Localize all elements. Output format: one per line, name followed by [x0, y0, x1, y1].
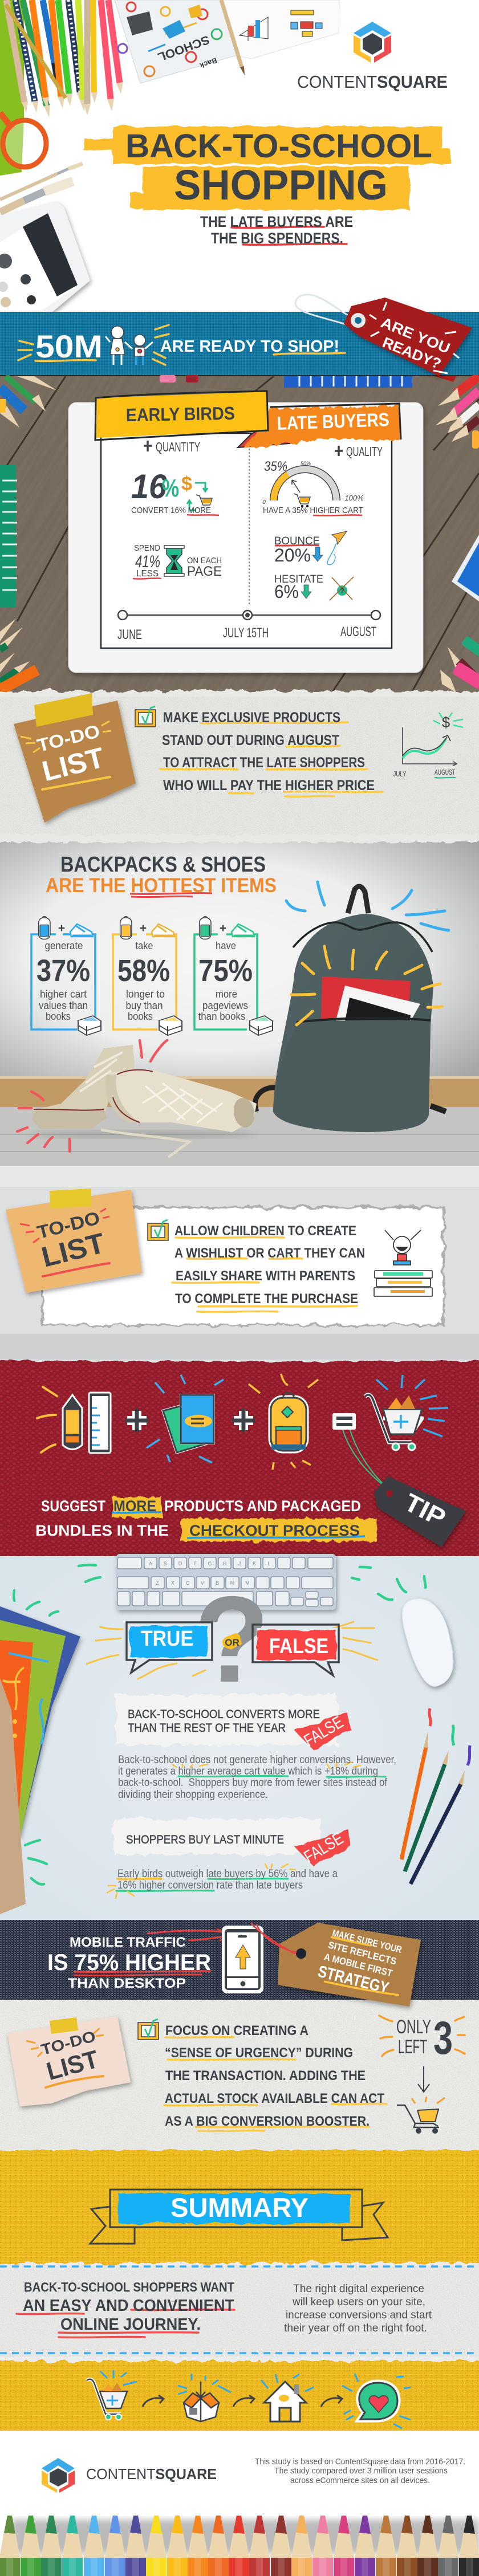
question mark: ? — [194, 1570, 270, 1708]
icon: backpack — [269, 1393, 308, 1452]
myth one title: BACK-TO-SCHOOL CONVERTS MORE — [128, 1708, 320, 1721]
myth two torn paper — [113, 1818, 321, 1854]
plus quality — [335, 444, 383, 459]
skirting board — [0, 1077, 479, 1109]
yellow fabric background — [0, 2150, 479, 2431]
tag: tip: TIP — [400, 1488, 450, 1532]
coloured pencil row — [0, 2516, 479, 2576]
floor — [0, 1107, 479, 1170]
early birds banner: EARLY BIRDS — [125, 403, 235, 425]
icon: checkbox — [148, 1220, 168, 1240]
yellow brush highlights — [112, 1497, 377, 1541]
sneaker shadow — [29, 1130, 257, 1138]
tip text: SUGGEST — [41, 1497, 105, 1515]
to-do one text: TO ATTRACT THE LATE SHOPPERS — [163, 755, 365, 771]
section: mobile traffic — [0, 1920, 479, 2007]
icon: checkbox — [135, 706, 156, 727]
header photo: pencils and school supplies — [0, 0, 339, 312]
tip text: PRODUCTS AND PACKAGED — [164, 1497, 361, 1515]
note: TO-DO — [39, 2028, 98, 2058]
tag: tip — [374, 1476, 466, 1547]
convert caption: CONVERT 16% MORE — [131, 506, 211, 515]
summary band texture — [0, 2266, 479, 2357]
top right pencils — [436, 376, 479, 449]
chart: price rising from July to August: $ — [442, 714, 450, 731]
mouse — [402, 1599, 453, 1686]
hesitate stat — [274, 573, 354, 602]
logo: ContentSquare — [297, 22, 448, 92]
true bubble: TRUE — [141, 1627, 193, 1651]
to-do three text: THE TRANSACTION. ADDING THE — [165, 2068, 366, 2083]
right paint palette — [452, 535, 479, 601]
myth one — [116, 1695, 396, 1801]
summary main statement: AN EASY AND CONVENIENT — [23, 2297, 234, 2315]
timeline: AUGUST — [340, 624, 376, 640]
icon: cart — [397, 2097, 445, 2134]
wall background — [0, 841, 479, 1081]
card: 75 percent: 75% — [198, 954, 253, 988]
icon: child on books — [374, 1230, 432, 1296]
card: 37 percent: higher cart — [40, 988, 87, 1000]
summary torn band — [0, 2263, 479, 2361]
chart: price rising from July to August — [393, 713, 463, 778]
keyboard: K — [253, 1561, 256, 1566]
to-do one underlines — [160, 722, 383, 797]
keyboard: M — [245, 1580, 250, 1586]
myth two highlights — [107, 1864, 295, 1898]
gauge: 35% — [264, 459, 287, 474]
or badge — [222, 1633, 243, 1650]
bottom right pencils — [440, 636, 479, 693]
title — [84, 127, 450, 210]
front sneaker — [101, 1069, 257, 1157]
chart: price rising from July to August: JULY — [393, 770, 407, 778]
kraft tag: STRATEGY — [316, 1963, 391, 1997]
desk background — [0, 1556, 479, 1921]
banner text: ARE READY TO SHOP! — [160, 337, 339, 356]
card: 58 percent: take — [136, 940, 153, 951]
to-do three text: AS A BIG CONVERSION BOOSTER. — [165, 2114, 370, 2129]
card: 75 percent: + — [220, 922, 226, 935]
section: backpacks and shoes — [0, 835, 479, 1189]
icon: box — [184, 2382, 219, 2422]
spend 41 percent — [133, 543, 161, 579]
subtitle line 1: THE LATE BUYERS ARE — [200, 213, 353, 230]
paper background of to-do list three — [0, 2000, 479, 2151]
tag: are you ready: ARE YOU — [379, 314, 453, 357]
tablet photo — [0, 201, 90, 312]
gauge: 0 — [262, 499, 266, 506]
cart caption: HAVE A 35% HIGHER CART — [263, 506, 363, 515]
section: true or false — [0, 1554, 479, 1921]
myth one title second line: THAN THE REST OF THE YEAR — [128, 1722, 286, 1735]
summary ribbon — [90, 2190, 388, 2244]
icon: checkbox — [138, 2019, 159, 2040]
16 percent stat — [131, 467, 212, 510]
arrow down — [418, 2066, 429, 2092]
timeline: JUNE — [117, 627, 142, 642]
kraft tag: MAKE SURE YOUR — [331, 1927, 403, 1955]
hesitate stat: ? — [340, 587, 344, 595]
card: 58 percent: + — [140, 922, 147, 935]
note: LIST — [43, 2045, 102, 2086]
keyboard: X — [171, 1580, 174, 1586]
to-do two text: A WISHLIST OR CART THEY CAN — [174, 1246, 365, 1261]
chart: price rising from July to August: AUGUST — [435, 768, 455, 776]
yellow rays — [87, 1622, 377, 1679]
card: 58 percent — [113, 917, 182, 1035]
desk supplies around tablet — [0, 375, 479, 693]
title line 1: BACK-TO-SCHOOL — [125, 128, 432, 165]
spend 41 percent: LESS — [136, 569, 159, 579]
on each page: ON EACH — [187, 556, 222, 565]
arrow — [321, 2395, 342, 2407]
paint brushes — [0, 164, 83, 212]
timeline: JULY 15TH — [223, 625, 269, 641]
summary brush — [119, 2194, 350, 2223]
myth one torn paper — [116, 1695, 338, 1745]
myth one explanation — [118, 1754, 396, 1801]
keyboard: B — [216, 1580, 219, 1586]
wooden pencil on paper — [221, 0, 245, 75]
kraft tag — [251, 1923, 421, 2007]
sparks around pencil — [37, 1387, 57, 1452]
only 3 left: LEFT — [398, 2036, 427, 2058]
keyboard: S — [164, 1561, 167, 1566]
mobile traffic text: MOBILE TRAFFIC — [70, 1935, 186, 1950]
to-do one text — [162, 710, 375, 793]
myth two — [107, 1818, 351, 1898]
sparks around cart — [376, 1375, 448, 1436]
keyboard: H — [223, 1561, 226, 1566]
plus quantity: QUANTITY — [156, 439, 200, 454]
summary side text — [284, 2283, 432, 2334]
16 percent stat: % — [162, 474, 179, 502]
timeline — [117, 611, 380, 642]
to-do two text: TO COMPLETE THE PURCHASE — [175, 1291, 358, 1307]
late buyers column — [262, 444, 383, 602]
section: tip, bundles — [0, 1361, 479, 1561]
red underlines and arrows — [74, 1929, 229, 1976]
keyboard: J — [238, 1561, 241, 1566]
manila note: TO-DO — [35, 1207, 102, 1243]
plus sign — [127, 1411, 147, 1430]
keyboard: N — [230, 1580, 234, 1586]
title brush background — [84, 127, 450, 210]
to-do one text: MAKE EXCLUSIVE PRODUCTS — [163, 710, 340, 726]
false bubble: FALSE — [269, 1634, 328, 1658]
myth two explanation: Early birds outweigh late buyers by 56% and have a — [117, 1868, 338, 1880]
magnifier — [0, 113, 46, 167]
footer background — [0, 2431, 479, 2576]
bottom left pencils — [0, 618, 37, 690]
card: 75 percent — [194, 917, 273, 1035]
torn paper background — [0, 691, 479, 845]
icon: cart — [365, 1395, 422, 1450]
spend 41 percent: 41% — [135, 552, 160, 571]
sketch paper — [221, 0, 339, 59]
16 percent stat: 16 — [131, 467, 167, 506]
to-do two text: EASILY SHARE WITH PARENTS — [176, 1268, 355, 1284]
keyboard: D — [178, 1561, 182, 1566]
16 percent stat: $ — [181, 473, 192, 495]
icon: notebooks — [163, 1395, 214, 1452]
sparks around backpack — [249, 1374, 318, 1470]
subtitle — [200, 213, 353, 247]
section: to-do list one — [0, 691, 479, 845]
study note: This study is based on ContentSquare data from 2016-2017. — [255, 2457, 465, 2467]
plus quantity — [144, 439, 200, 454]
or badge: OR — [225, 1637, 240, 1648]
logo hexagon — [354, 22, 391, 63]
to-do two text — [174, 1223, 365, 1307]
green sparks — [14, 1565, 426, 1885]
red knit background — [0, 1361, 479, 1561]
kraft tag: SITE REFLECTS — [327, 1939, 397, 1967]
card: 37 percent: books — [46, 1011, 71, 1022]
blue underlines — [112, 1512, 365, 1538]
gauge: 100% — [344, 494, 364, 502]
card: 58 percent: 58% — [117, 954, 170, 988]
arrow — [143, 2395, 164, 2407]
tablet screen — [101, 433, 392, 648]
to-do three text: FOCUS ON CREATING A — [165, 2023, 308, 2038]
card: 37 percent: 37% — [36, 954, 90, 988]
journey icons — [87, 2370, 411, 2428]
myth one explanation: dividing their shopping experience. — [118, 1789, 268, 1801]
to-do three text — [165, 2023, 384, 2129]
hesitate stat: 6% — [274, 581, 299, 602]
sparks around notebooks — [147, 1375, 224, 1463]
footer logo wordmark: CONTENTSQUARE — [86, 2465, 217, 2483]
sneakers — [29, 1045, 257, 1157]
summary side text: increase conversions and start — [286, 2309, 432, 2321]
false stamp: FALSE — [301, 1829, 347, 1867]
red notebook — [321, 976, 411, 1019]
folders — [0, 1606, 80, 1914]
card: 37 percent: + — [58, 922, 65, 935]
card: 37 percent: generate — [44, 940, 83, 951]
keyboard: F — [193, 1561, 197, 1566]
myth two title: SHOPPERS BUY LAST MINUTE — [126, 1833, 284, 1846]
icon: ruler — [89, 1393, 111, 1453]
false bubble — [253, 1625, 339, 1675]
kraft note — [14, 693, 136, 823]
highlight strokes — [17, 882, 449, 1151]
keyboard: Z — [156, 1580, 159, 1586]
only 3 left: 3 — [433, 2012, 453, 2064]
to-do one text: WHO WILL PAY THE HIGHER PRICE — [163, 778, 375, 793]
only 3 left — [379, 2012, 465, 2064]
card: 58 percent: longer to — [126, 988, 165, 1000]
tag string — [295, 295, 358, 325]
50M figure: 50M — [35, 328, 103, 364]
tip text: BUNDLES IN THE — [35, 1522, 169, 1539]
tag: are you ready: READY? — [380, 333, 444, 372]
on each page — [187, 556, 222, 579]
keyboard: V — [201, 1580, 204, 1586]
plus quality: QUALITY — [346, 444, 383, 459]
myth one explanation: Back-to-schoool does not generate higher conversions. However, — [118, 1754, 396, 1766]
mobile traffic figure: IS 75% HIGHER — [47, 1950, 211, 1975]
summary main statement: ONLINE JOURNEY. — [60, 2315, 201, 2334]
left green spiral notebook — [0, 465, 17, 608]
myth one highlights — [173, 1762, 385, 1777]
gauge — [262, 459, 364, 507]
section: wooden table — [0, 375, 479, 693]
divider — [249, 449, 250, 606]
dashed stitch lines — [0, 2266, 479, 2353]
manila note: LIST — [38, 1227, 108, 1273]
icon: pencil — [63, 1395, 82, 1449]
myth two explanation: 16% higher conversion rate than late buyers — [117, 1879, 303, 1891]
summary side text: The right digital experience — [293, 2283, 424, 2295]
arrow — [233, 2395, 254, 2407]
tablet in pocket — [336, 986, 420, 1023]
keyboard: A — [149, 1561, 152, 1566]
ruler — [0, 0, 24, 176]
to-do one text: STAND OUT DURING AUGUST — [162, 732, 339, 748]
note — [7, 2016, 131, 2106]
subtitle line 2: THE BIG SPENDERS. — [211, 230, 343, 247]
myth one explanation: back-to-school. Shoppers buy more from fewer sites instead of — [118, 1777, 388, 1789]
banner: 50M ready to shop — [0, 295, 479, 376]
footer — [0, 2431, 479, 2576]
bounce stat: BOUNCE — [274, 535, 320, 547]
manila note — [6, 1189, 142, 1293]
doodle notebook: SCHOOL — [156, 32, 211, 64]
keyboard — [116, 1554, 336, 1610]
coloured pencils — [6, 0, 123, 117]
card: 75 percent: have — [216, 940, 236, 951]
bounce stat — [274, 531, 347, 565]
summary main statement — [23, 2280, 234, 2334]
summary side text: will keep users on your site, — [292, 2296, 425, 2308]
keyboard: C — [186, 1580, 190, 1586]
on each page: PAGE — [187, 564, 222, 579]
early birds column — [131, 439, 222, 579]
to-do three text: ACTUAL STOCK AVAILABLE CAN ACT — [165, 2091, 384, 2106]
doodle notebook: Back — [198, 56, 218, 70]
to-do two underlines — [172, 1237, 357, 1312]
keyboard: L — [267, 1561, 271, 1566]
top markers and blue spiral notebook — [160, 375, 456, 388]
myth one explanation: it generates a higher average cart value which is +18% during — [118, 1765, 378, 1777]
card: 75 percent: than books — [198, 1011, 245, 1022]
crumpled paper background — [0, 1187, 479, 1364]
card: 37 percent — [31, 917, 101, 1035]
title line 2: SHOPPING — [174, 161, 388, 209]
top left pencils — [0, 376, 57, 428]
card: 75 percent: pageviews — [202, 1000, 248, 1011]
denim background — [0, 1920, 479, 2000]
icon: hourglass — [164, 546, 184, 576]
kids icon — [105, 326, 153, 365]
section: summary — [0, 2150, 479, 2431]
summary side text: their year off on the right foot. — [284, 2322, 427, 2334]
spend 41 percent: SPEND — [134, 543, 160, 553]
tip text: MORE — [113, 1497, 156, 1515]
section: to-do list three — [7, 2012, 465, 2134]
late buyers banner: LATE BUYERS — [277, 409, 389, 434]
tip text: CHECKOUT PROCESS — [189, 1522, 360, 1539]
to-do two text: ALLOW CHILDREN TO CREATE — [174, 1223, 356, 1239]
doodle notebook — [115, 0, 237, 83]
logo wordmark: CONTENTSQUARE — [297, 72, 448, 92]
tablet frame — [68, 402, 423, 673]
to-do three text: “SENSE OF URGENCY” DURING — [165, 2045, 353, 2061]
myth two explanation — [117, 1868, 338, 1891]
banner underlines and sparks — [18, 325, 345, 365]
icon: chat heart — [358, 2382, 399, 2420]
early birds banner — [95, 391, 268, 440]
summary main statement: BACK-TO-SCHOOL SHOPPERS WANT — [24, 2280, 234, 2294]
card: 37 percent: values than — [39, 1000, 88, 1011]
kraft tag: A MOBILE FIRST — [323, 1951, 394, 1979]
tag: are you ready — [295, 295, 472, 376]
only 3 left: ONLY — [396, 2016, 431, 2038]
rear sneaker — [32, 1045, 135, 1129]
plus sign — [234, 1411, 253, 1430]
section heading: ARE THE HOTTEST ITEMS — [46, 874, 277, 897]
false stamp: FALSE — [301, 1712, 347, 1751]
tip text — [35, 1497, 361, 1539]
torn white paper — [41, 1206, 445, 1326]
equals tag and string — [332, 1413, 388, 1488]
section: to-do list two — [0, 1187, 479, 1364]
section heading — [46, 853, 277, 897]
study note: The study compared over 3 million user sessions — [274, 2467, 448, 2476]
footer logo hexagon — [42, 2458, 75, 2493]
icon: house — [264, 2382, 306, 2422]
to-do three underlines — [164, 2037, 387, 2131]
card: 58 percent: buy than — [125, 1000, 163, 1011]
summary underlines — [17, 2309, 234, 2338]
blue sparks — [100, 2370, 411, 2428]
study note — [255, 2457, 465, 2485]
study note: across eCommerce sites on all devices. — [290, 2476, 430, 2485]
icon: phone — [222, 1926, 263, 1993]
desk pencils — [401, 1708, 470, 1884]
subtitle underline — [232, 227, 347, 245]
bounce stat: 20% — [274, 545, 311, 565]
kraft note: TO-DO — [35, 721, 102, 756]
summary heading: SUMMARY — [171, 2192, 308, 2223]
late buyers banner — [238, 404, 401, 449]
mobile traffic comparison: THAN DESKTOP — [68, 1976, 186, 1991]
kraft note: LIST — [39, 741, 107, 787]
icon: cart — [87, 2379, 127, 2420]
hesitate stat: HESITATE — [274, 573, 323, 585]
backpack — [255, 886, 446, 1132]
card: 75 percent: more — [216, 988, 237, 1000]
keyboard: G — [208, 1561, 212, 1566]
gauge: 50% — [301, 461, 311, 466]
card: 58 percent: books — [128, 1011, 153, 1022]
true bubble — [127, 1622, 212, 1672]
section heading: BACKPACKS & SHOES — [60, 853, 266, 877]
